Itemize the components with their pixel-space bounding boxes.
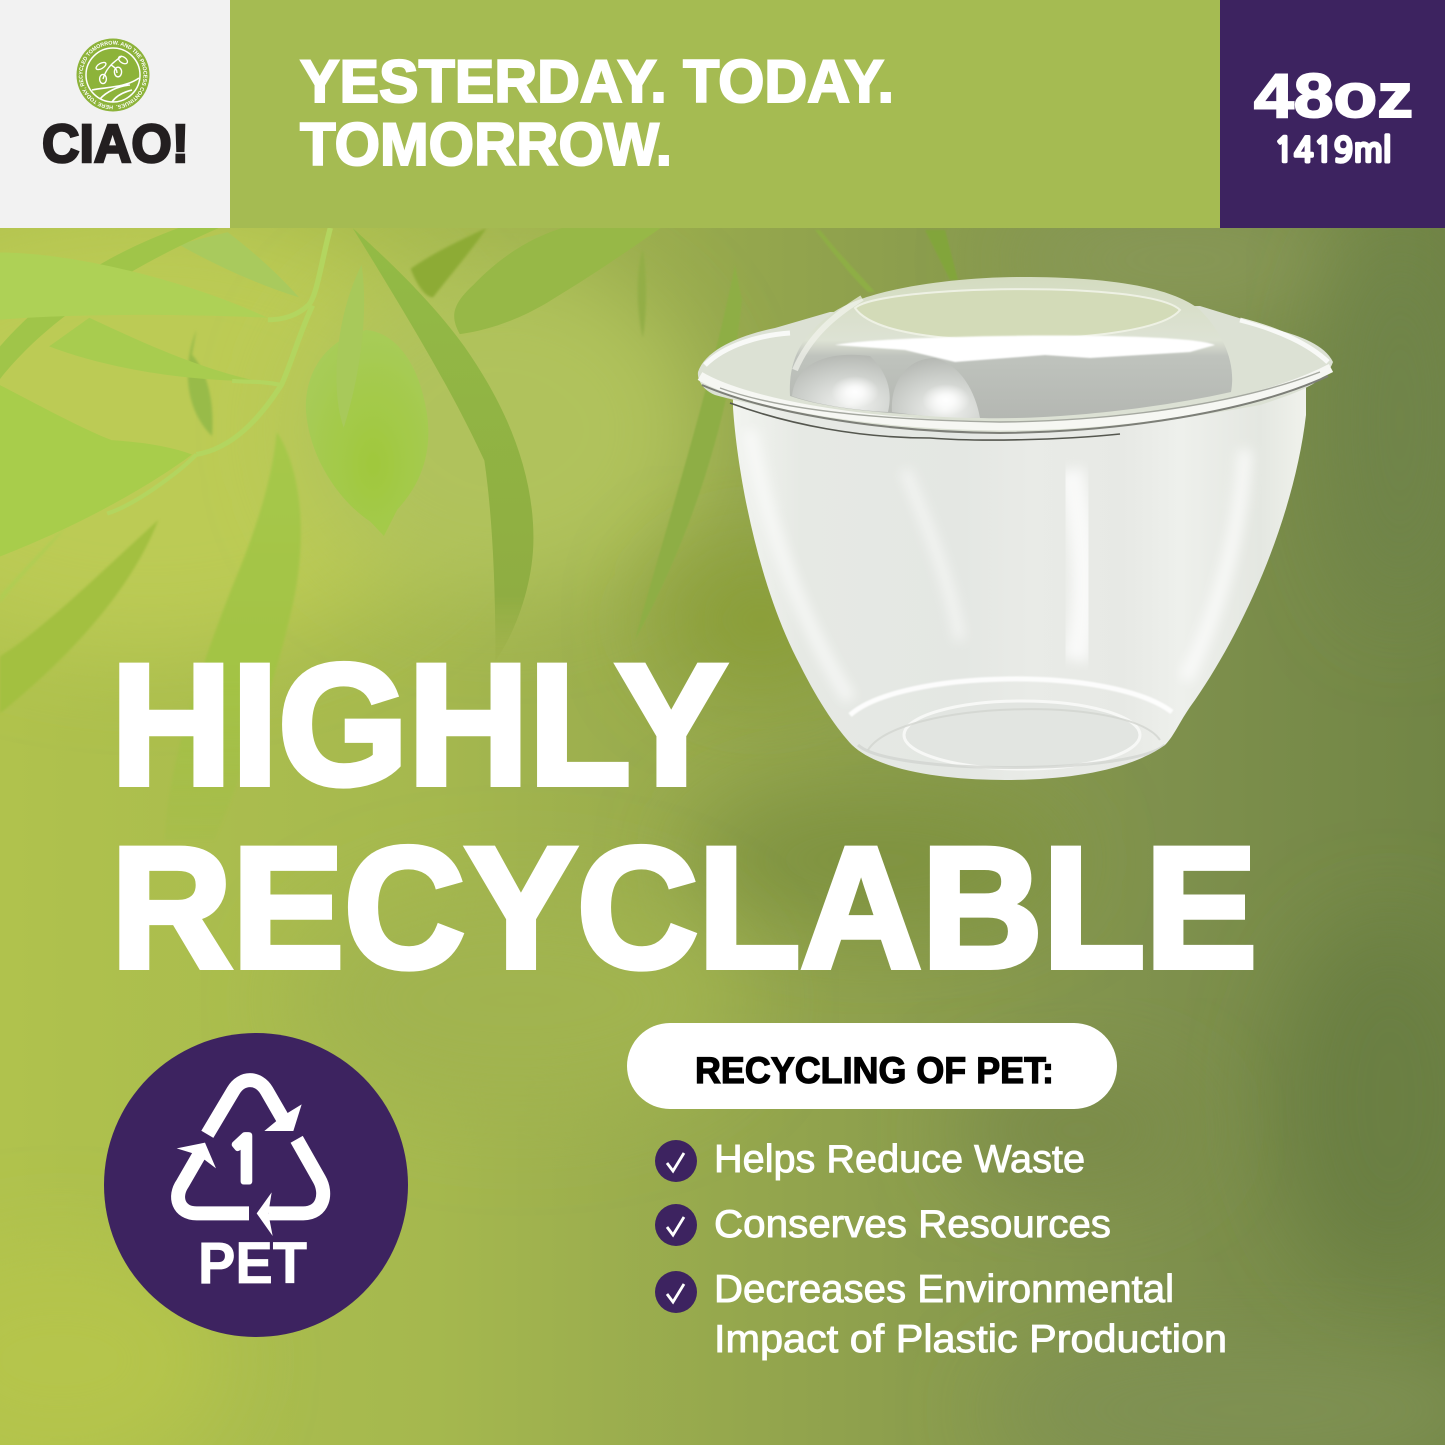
lid rim highlights <box>700 320 1331 440</box>
lid flange <box>698 306 1333 432</box>
benefit: decreases environmental impact: Decreases Environmental <box>714 1268 1174 1311</box>
header: slogan: TOMORROW. <box>300 111 672 178</box>
bowl body <box>733 380 1306 780</box>
benefit: helps reduce waste: Helps Reduce Waste <box>714 1138 1085 1181</box>
benefit: decreases environmental impact <box>655 1268 1227 1361</box>
icon: recycling triangle arrows <box>177 1080 323 1236</box>
size: millilitres: 1419ml <box>1274 134 1391 168</box>
badge number: 1 <box>226 1131 264 1192</box>
product photo: clear bowl with dome lid <box>698 277 1333 780</box>
pill heading: RECYCLING OF PET: <box>695 1050 1054 1091</box>
main heading: RECYCLABLE <box>111 812 1257 1004</box>
logo wordmark: CIAO! <box>42 114 189 174</box>
size: ounces: 48oz <box>1254 62 1413 131</box>
logo panel <box>0 0 230 228</box>
main heading <box>111 629 1257 1004</box>
main heading: HIGHLY <box>111 629 727 821</box>
header: slogan <box>300 48 894 178</box>
panel: recycling of PET <box>627 1023 1227 1361</box>
badge label: PET <box>198 1231 307 1296</box>
benefit: conserves resources: Conserves Resources <box>714 1203 1111 1246</box>
leaves and olive <box>0 228 660 727</box>
badge: PET 1 recycling symbol <box>104 1033 408 1337</box>
icon: Ciao olive seal: HERE TODAY, RECYCLED TOMORROW. AND THE PROCESS CONTINUES. <box>78 40 148 110</box>
header: slogan: YESTERDAY. TODAY. <box>300 48 894 115</box>
header bar <box>230 0 1220 228</box>
size panel <box>1220 0 1445 228</box>
lid dome <box>790 277 1232 418</box>
pill heading <box>627 1023 1117 1109</box>
header: green band <box>230 0 1220 228</box>
benefit: decreases environmental impact: Impact of Plastic Production <box>714 1318 1227 1361</box>
